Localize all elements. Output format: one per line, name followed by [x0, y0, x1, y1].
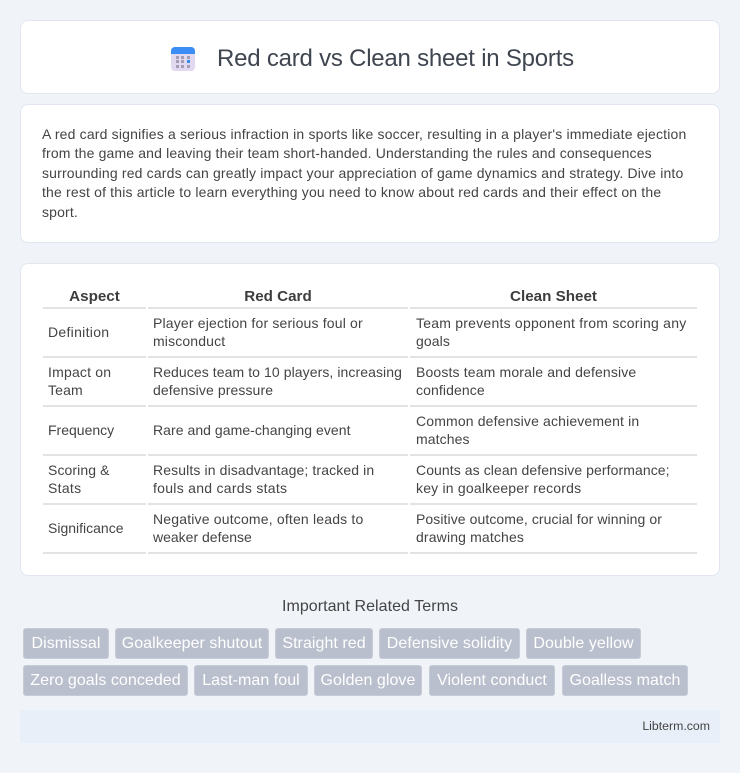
intro text: the rest of this article to learn everything you need to know about red cards and their effect on the — [42, 184, 661, 200]
row: scoring and stats: key in goalkeeper records — [416, 480, 581, 496]
row: frequency: Frequency — [48, 422, 114, 438]
row: frequency: Common defensive achievement in — [416, 413, 639, 429]
row: impact on team: Boosts team morale and defensive — [416, 364, 636, 380]
row: scoring and stats: Stats — [48, 480, 81, 496]
row: impact on team: confidence — [416, 382, 485, 398]
table header: Red Card — [244, 288, 312, 305]
related terms tags — [23, 628, 688, 696]
row: definition — [48, 315, 686, 349]
comparison table panel — [20, 263, 720, 576]
row: scoring and stats: Counts as clean defensive performance; — [416, 462, 670, 478]
related terms tags: Double yellow — [533, 635, 634, 652]
row: significance: drawing matches — [416, 529, 524, 545]
row: scoring and stats: Scoring & — [48, 462, 110, 478]
related terms heading: Important Related Terms — [282, 598, 458, 615]
row: definition: Player ejection for serious foul or — [153, 315, 363, 331]
related terms tags: Defensive solidity — [387, 635, 512, 652]
intro text: sport. — [42, 204, 78, 220]
related terms tags: Goalkeeper shutout — [122, 635, 262, 652]
related terms tags: Last-man foul — [202, 672, 300, 689]
row: scoring and stats: fouls and cards stats — [153, 480, 287, 496]
row: scoring and stats — [48, 462, 670, 496]
row: frequency: Rare and game-changing event — [153, 422, 351, 438]
intro panel — [20, 104, 720, 243]
title: Red card vs Clean sheet in Sports — [217, 45, 574, 72]
related terms tags: Straight red — [282, 635, 366, 652]
row: significance: weaker defense — [153, 529, 252, 545]
intro text: from the game and leaving their team short-handed. Understanding the rules and consequences — [42, 145, 652, 161]
row: impact on team: Impact on — [48, 364, 111, 380]
related terms tags: Golden glove — [321, 672, 415, 689]
table header — [69, 288, 597, 305]
row: definition: Team prevents opponent from scoring any — [416, 315, 686, 331]
row: impact on team: Team — [48, 382, 83, 398]
header panel — [20, 20, 720, 94]
related terms tags: Violent conduct — [437, 672, 547, 689]
related terms tags: Dismissal — [32, 635, 100, 652]
row: significance — [48, 511, 662, 545]
footer credit: Libterm.com — [642, 719, 710, 733]
row: frequency: matches — [416, 431, 470, 447]
table header: Clean Sheet — [510, 288, 597, 305]
related terms tags: Goalless match — [570, 672, 680, 689]
row: impact on team — [48, 364, 636, 398]
row: frequency — [48, 413, 639, 447]
intro text: A red card signifies a serious infraction in sports like soccer, resulting in a player's immediate ejection — [42, 126, 686, 142]
intro text — [42, 126, 686, 220]
row: definition: goals — [416, 333, 450, 349]
intro text: surrounding red cards can greatly impact your appreciation of game dynamics and strategy. Dive into — [42, 165, 683, 181]
table header: Aspect — [69, 288, 120, 305]
row: significance: Positive outcome, crucial for winning or — [416, 511, 662, 527]
icon: calendar — [171, 47, 195, 71]
row: impact on team: defensive pressure — [153, 382, 273, 398]
row: definition: Definition — [48, 324, 109, 340]
row: impact on team: Reduces team to 10 players, increasing — [153, 364, 402, 380]
row: definition: misconduct — [153, 333, 225, 349]
related terms tags: Zero goals conceded — [30, 672, 181, 689]
row: scoring and stats: Results in disadvantage; tracked in — [153, 462, 374, 478]
row: significance: Negative outcome, often leads to — [153, 511, 363, 527]
footer bar — [20, 710, 720, 743]
row: significance: Significance — [48, 520, 124, 536]
